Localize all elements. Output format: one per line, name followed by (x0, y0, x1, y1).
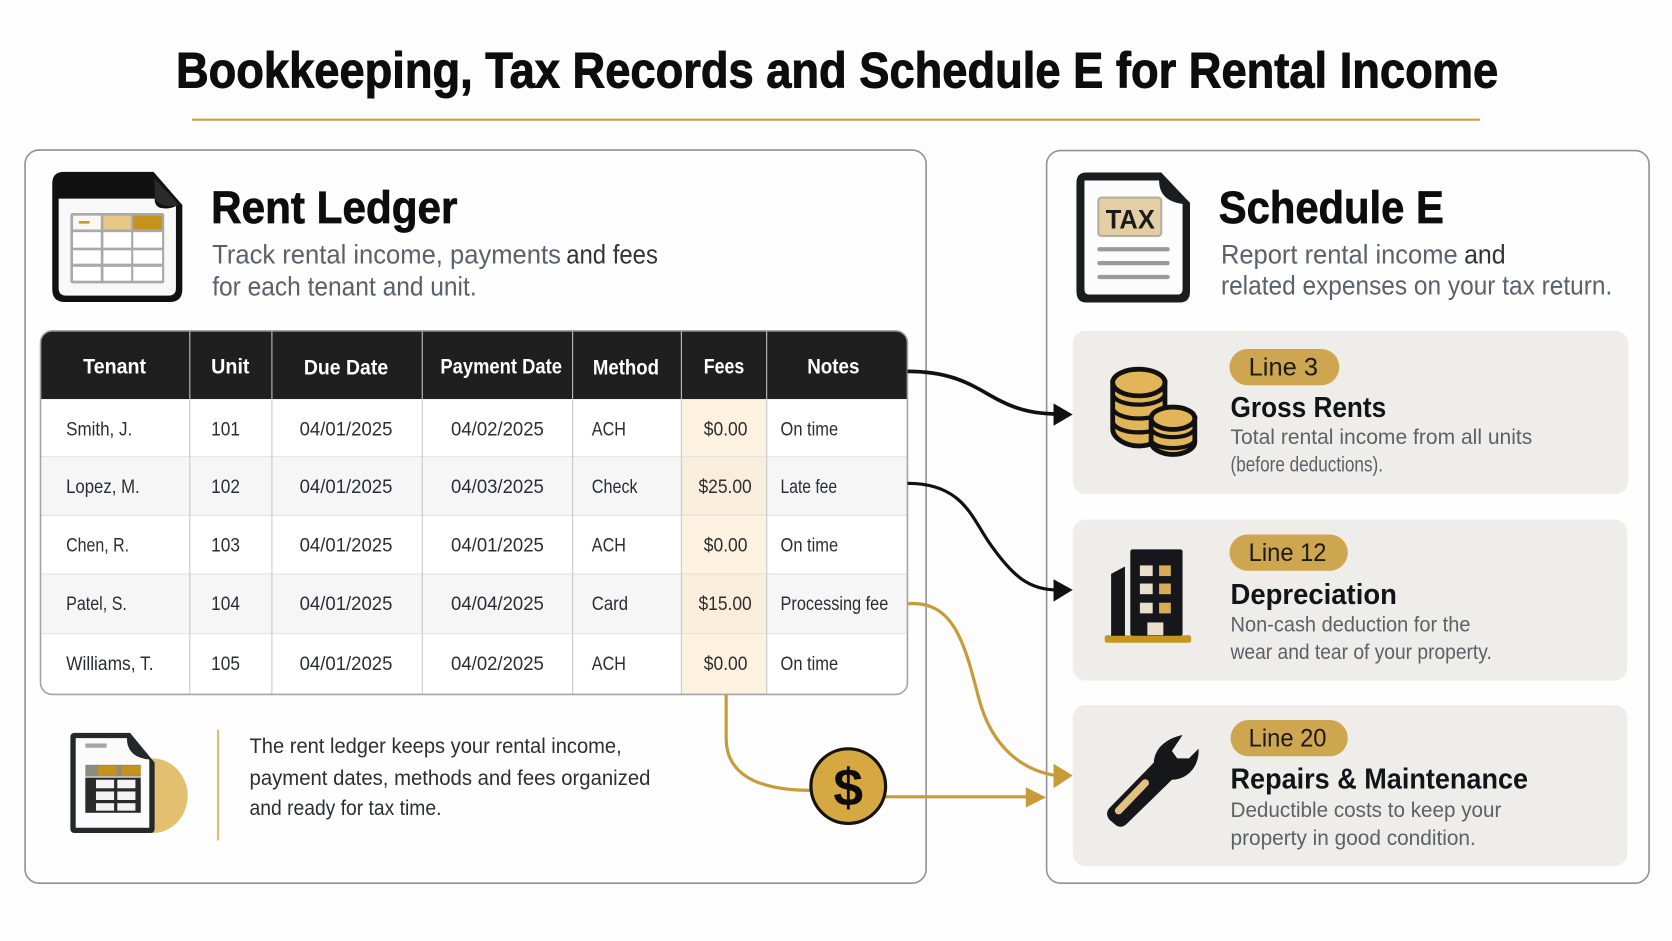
depreciation description: wear and tear of your property. (1230, 640, 1492, 664)
table row: Chen: ACH (592, 536, 626, 557)
repairs description: Deductible costs to keep your (1231, 798, 1501, 822)
table row: Williams (66, 654, 838, 675)
table row: Chen (66, 536, 838, 557)
repairs and maintenance title: Repairs & Maintenance (1231, 763, 1528, 795)
table row: Patel: 104 (211, 594, 240, 615)
line 20 pill: Line 20 (1249, 726, 1327, 753)
table row: Chen: 04/01/2025 (300, 536, 392, 557)
rent ledger description: for each tenant and unit. (212, 272, 477, 302)
icon: building (1105, 549, 1191, 643)
arrow: ledger to line 12 (907, 483, 1073, 602)
icon: coin stacks (1113, 369, 1195, 455)
heading: rent ledger: Rent Ledger (211, 181, 458, 233)
vertical divider (217, 730, 219, 841)
table row: Chen: $0.00 (704, 536, 747, 557)
icon: tax document: TAX (1106, 204, 1155, 234)
table row: Smith: On time (781, 419, 838, 440)
arrow: fees column through coin (726, 694, 1046, 807)
gross rents description (1231, 425, 1532, 477)
table row: Smith: 101 (211, 419, 240, 440)
table row: Lopez: 102 (211, 477, 240, 498)
card: line 3 gross rents (1073, 331, 1628, 494)
card: line 12 depreciation (1073, 520, 1627, 681)
table header row: Method (593, 356, 659, 380)
rent ledger table (41, 331, 907, 694)
rent ledger description: and fees (566, 240, 658, 270)
icon: dollar coin: $ (833, 758, 863, 817)
table row: Smith: 04/02/2025 (451, 419, 544, 440)
table row: Patel: 04/01/2025 (300, 594, 392, 615)
table row: Patel: 04/04/2025 (451, 594, 544, 615)
table row: Smith: Smith, J. (66, 419, 132, 440)
table row: Chen: 04/01/2025 (451, 536, 544, 557)
panel: rent ledger (25, 150, 926, 883)
table row: Smith: $0.00 (704, 419, 747, 440)
icon: wrench (1107, 735, 1199, 827)
ledger summary note: payment dates, methods and fees organized (250, 766, 650, 790)
table row: Smith: ACH (592, 419, 626, 440)
panel: schedule E (1047, 151, 1649, 883)
line 3 pill: Line 3 (1249, 355, 1318, 382)
table header row: Fees (704, 354, 744, 378)
table header row: Tenant (83, 354, 146, 378)
table row: Chen: 103 (211, 536, 240, 557)
table row: Patel: Card (592, 594, 628, 615)
line 20 pill (1231, 720, 1348, 756)
table row: Lopez: $25.00 (698, 477, 752, 498)
table row: Williams: On time (781, 654, 838, 675)
icon: ledger document (52, 172, 182, 302)
rent ledger description: Track rental income, payments (212, 240, 561, 270)
table header row: Notes (807, 354, 859, 378)
table row: Smith: 04/01/2025 (300, 419, 392, 440)
table row: Smith (66, 419, 838, 440)
rent ledger description (212, 240, 658, 302)
table row: Lopez: Check (592, 477, 638, 498)
ledger summary note: and ready for tax time. (250, 796, 441, 820)
gross rents description: Total rental income from all units (1231, 425, 1532, 449)
table row: Chen: On time (781, 536, 838, 557)
table row: Patel: $15.00 (698, 594, 752, 615)
line 12 pill: Line 12 (1249, 540, 1327, 567)
repairs description (1231, 798, 1501, 850)
table row: Lopez: 04/01/2025 (300, 477, 392, 498)
icon: dollar coin (811, 749, 886, 823)
repairs description: property in good condition. (1231, 826, 1476, 850)
schedule E description: Report rental income (1221, 240, 1458, 270)
depreciation title: Depreciation (1231, 579, 1397, 611)
icon: tax document (1076, 172, 1190, 303)
line 12 pill (1229, 534, 1348, 571)
table row: Williams: 105 (211, 654, 240, 675)
title: Bookkeeping, Tax Records and Schedule E for Rental Income (176, 43, 1498, 99)
gross rents title: Gross Rents (1231, 392, 1386, 424)
schedule E description: and (1464, 240, 1506, 270)
table body (41, 331, 907, 694)
arrow: processing fee to line 20 (907, 604, 1073, 788)
table row: Lopez (66, 477, 837, 498)
table header row: Payment Date (440, 354, 562, 378)
table header row (83, 354, 859, 380)
table row: Williams: 04/02/2025 (451, 654, 544, 675)
schedule E description (1221, 240, 1612, 301)
heading: schedule E: Schedule E (1219, 181, 1444, 233)
table row: Patel (66, 594, 888, 615)
table header row: Due Date (304, 356, 388, 380)
table row: Lopez: Lopez, M. (66, 477, 140, 498)
table row: Williams: Williams, T. (66, 654, 154, 675)
arrow: ledger to line 3 (907, 371, 1073, 426)
table row: Chen: Chen, R. (66, 536, 129, 557)
depreciation description (1230, 613, 1492, 664)
schedule E description: related expenses on your tax return. (1221, 271, 1612, 301)
rent ledger panel frame (25, 150, 926, 883)
table row: Lopez: Late fee (781, 477, 837, 498)
gross rents description: (before deductions). (1231, 453, 1383, 477)
schedule E panel frame (1047, 151, 1649, 883)
depreciation description: Non-cash deduction for the (1231, 613, 1470, 637)
icon: small ledger with gold circle (70, 733, 188, 833)
table row: Williams: 04/01/2025 (300, 654, 392, 675)
table row: Patel: Processing fee (781, 594, 888, 615)
ledger summary note (250, 734, 650, 820)
table row: Patel: Patel, S. (66, 594, 127, 615)
table row: Williams: $0.00 (704, 654, 747, 675)
table header row: Unit (211, 354, 250, 378)
table row: Williams: ACH (592, 654, 626, 675)
table row: Lopez: 04/03/2025 (451, 477, 544, 498)
line 3 pill (1229, 349, 1339, 385)
card: line 20 repairs and maintenance (1073, 705, 1627, 866)
ledger summary note: The rent ledger keeps your rental income, (250, 734, 622, 758)
